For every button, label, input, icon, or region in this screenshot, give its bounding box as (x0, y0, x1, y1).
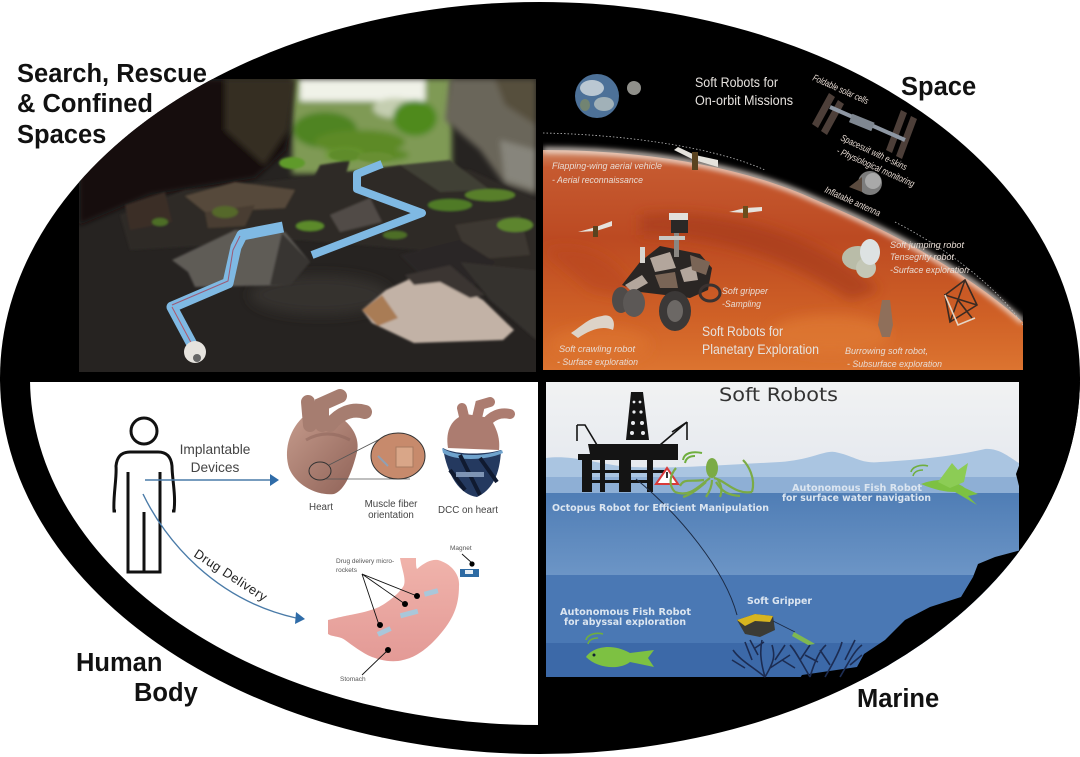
waves (546, 449, 1019, 477)
space labels: Soft jumping robot (890, 240, 964, 251)
tensegrity robot (945, 280, 977, 325)
sky (546, 382, 1019, 468)
person icon (114, 418, 175, 572)
arrow: drug delivery (143, 494, 305, 624)
space labels: - Physiological monitoring (835, 146, 916, 190)
ground patches (250, 275, 390, 315)
heart labels: DCC on heart (438, 505, 498, 516)
space labels: Inflatable antenna (823, 185, 882, 219)
heading: search rescue and confined spaces: & Confined (17, 90, 153, 118)
rock belt (120, 149, 536, 340)
burrowing robot (878, 300, 893, 337)
cave walls (79, 79, 536, 225)
robot camera head (184, 341, 206, 363)
tether cable (636, 479, 737, 615)
space labels (552, 73, 969, 370)
wifi signal: abyssal fish (586, 633, 603, 644)
marine labels: Autonomous Fish Robot (560, 607, 691, 618)
marine title: Soft Robots (719, 384, 838, 406)
soft crawling robot (571, 315, 614, 338)
space labels: - Surface exploration (557, 357, 638, 368)
stomach labels: Stomach (340, 676, 366, 683)
heading: human body: Body (134, 679, 199, 707)
heading: marine: Marine (857, 685, 939, 713)
marine labels: Autonomous Fish Robot (792, 483, 922, 494)
stomach illustration (328, 554, 479, 675)
heading: search rescue and confined spaces (17, 60, 207, 149)
panel: human body (30, 382, 538, 727)
panel: marine scene (546, 382, 1080, 678)
stomach labels: Magnet (450, 545, 472, 552)
label: implantable devices (180, 442, 250, 475)
space labels: Soft Robots for (695, 75, 778, 90)
stomach labels (336, 545, 472, 683)
marine labels: for surface water navigation (782, 493, 931, 504)
label: implantable devices: Devices (191, 460, 239, 475)
moon (627, 81, 641, 95)
heart labels (309, 499, 498, 521)
arrow: implantable devices (145, 474, 279, 486)
soft jumping robot (842, 239, 880, 278)
darker terrain bands (574, 212, 884, 350)
panel: search and rescue cave photo (79, 79, 536, 372)
heart labels: orientation (368, 510, 414, 521)
heading: space: Space (901, 73, 976, 101)
space station (812, 93, 917, 159)
space labels: Soft Robots for (702, 324, 783, 339)
heart labels: Heart (309, 502, 333, 513)
space labels: -Surface exploration (890, 265, 969, 276)
marine labels (552, 483, 931, 628)
soft gripper (773, 621, 815, 645)
inflatable antenna (849, 171, 882, 195)
space labels: - Subsurface exploration (847, 359, 942, 370)
stomach labels: rockets (336, 567, 358, 574)
wifi signal: surface fish (911, 465, 928, 476)
atmosphere glow (543, 150, 1023, 322)
marine labels: Soft Gripper (747, 596, 812, 607)
Mars surface (543, 150, 1023, 370)
oil rig (577, 392, 687, 492)
wifi signal: octopus (683, 452, 702, 463)
space labels: Spacesuit with e-skins (839, 133, 909, 173)
rover (612, 213, 720, 331)
label: implantable devices: Implantable (180, 442, 250, 457)
space labels: On-orbit Missions (695, 93, 793, 108)
marine labels: for abyssal exploration (564, 617, 686, 628)
panel: space with Mars (543, 73, 1023, 370)
heading: human body: Human (76, 649, 162, 677)
warning sign (656, 468, 678, 484)
abyssal fish robot (586, 647, 654, 667)
space labels: -Sampling (722, 299, 762, 310)
space labels: Soft gripper (722, 286, 769, 297)
coral (732, 640, 862, 677)
heading: search rescue and confined spaces: Search, Rescue (17, 60, 207, 88)
heading: human body (76, 649, 199, 707)
heading: search rescue and confined spaces: Spaces (17, 121, 106, 149)
heart labels: Muscle fiber (365, 499, 418, 510)
space labels: Tensegrity robot (890, 252, 954, 263)
cave opening with foliage (292, 79, 452, 174)
flapping wing robots (578, 147, 762, 237)
heart illustration (287, 396, 425, 494)
ROV (737, 614, 775, 637)
marine labels: Octopus Robot for Efficient Manipulation (552, 503, 769, 514)
space labels: Flapping-wing aerial vehicle (552, 161, 662, 172)
water layers (546, 477, 1019, 493)
DCC heart illustration (442, 402, 510, 497)
rock silhouette (800, 382, 1080, 678)
grey boulder (172, 230, 310, 287)
space labels: Foldable solar cells (811, 73, 870, 107)
label: drug delivery: Drug Delivery (191, 546, 270, 605)
white quartz rock (362, 265, 514, 343)
blue soft robot tube (172, 164, 422, 350)
dotted orbit line (543, 133, 1023, 325)
space labels: - Aerial reconnaissance (552, 175, 643, 186)
surface fish robot (921, 463, 978, 505)
space labels: Planetary Exploration (702, 342, 819, 357)
earth (575, 74, 619, 118)
stomach labels: Drug delivery micro- (336, 558, 394, 565)
octopus robot (671, 458, 753, 497)
space labels: Soft crawling robot (559, 344, 635, 355)
space labels: Burrowing soft robot, (845, 346, 928, 357)
